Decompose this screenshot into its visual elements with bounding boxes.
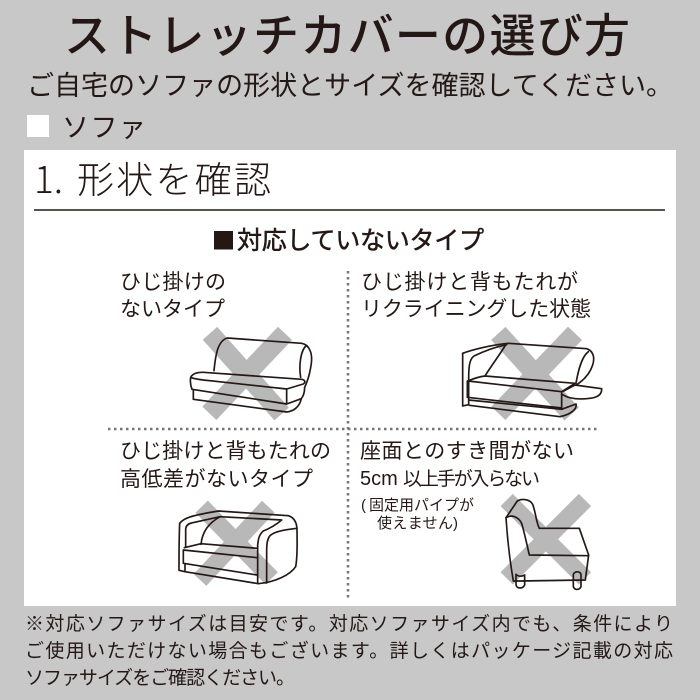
label: no gap at seat: 5cm — [360, 468, 398, 490]
icon: sofa without armrests, crossed out — [190, 333, 312, 414]
label: reclining: ひじ掛けと背もたれが — [361, 271, 578, 294]
label: no height difference: ひじ掛けと背もたれの — [120, 440, 331, 463]
footnote — [25, 613, 673, 689]
label: no height difference: 高低差がないタイプ — [120, 468, 313, 491]
icon: sofa with no height difference, crossed out — [179, 507, 297, 584]
category heading: sofa: ソファ — [62, 113, 146, 143]
icon: reclining sofa, crossed out — [463, 333, 602, 417]
footnote: ご使用いただけない場合もございます。詳しくはパッケージ記載の対応 — [25, 639, 673, 662]
unsupported types heading: 対応していないタイプ — [237, 227, 484, 255]
title: ストレッチカバーの選び方 — [64, 10, 630, 62]
label: no gap at seat: ) — [453, 515, 458, 532]
footnote: ※対応ソファサイズは目安です。対応ソファサイズ内でも、条件により — [25, 613, 673, 635]
footnote: ソファサイズをご確認ください。 — [25, 667, 295, 689]
icon: armchair without gap, crossed out — [506, 499, 589, 589]
label: no armrests: ないタイプ — [120, 298, 225, 321]
label: no gap at seat: 座面とのすき間がない — [360, 440, 574, 463]
subtitle: ご自宅のソファの形状とサイズを確認してください。 — [27, 71, 673, 101]
label: reclining: リクライニングした状態 — [361, 298, 591, 321]
label: no gap at seat: 固定用パイプが — [369, 497, 474, 514]
panel: shape check — [24, 150, 676, 606]
label: no gap at seat: 以上手が入らない — [403, 468, 540, 490]
label: no height difference — [120, 440, 331, 491]
panel heading: 1. — [34, 150, 63, 204]
label: no gap at seat — [360, 440, 574, 532]
panel heading — [34, 150, 271, 204]
label: reclining — [361, 271, 591, 321]
panel heading: 形状を確認 — [77, 160, 271, 201]
label: no gap at seat: ( — [361, 497, 366, 514]
label: no armrests: ひじ掛けの — [120, 271, 226, 294]
label: no armrests — [120, 271, 226, 321]
label: no gap at seat: 使えません — [377, 515, 453, 532]
